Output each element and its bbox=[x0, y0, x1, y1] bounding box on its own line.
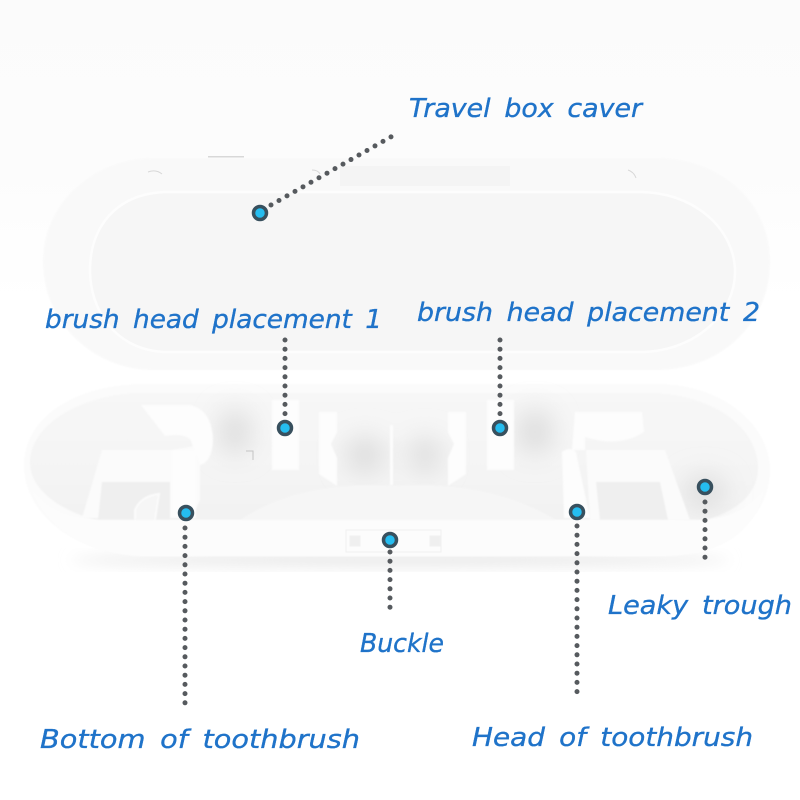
panel: box lid bbox=[43, 156, 770, 370]
annotation: travel box cover: Travel box caver bbox=[409, 94, 644, 124]
buckle bbox=[346, 530, 441, 552]
annotation: brush head placement 1 bbox=[45, 305, 382, 434]
annotation: brush head placement 2 bbox=[417, 298, 760, 434]
annotation: leaky trough: Leaky trough bbox=[608, 591, 792, 621]
annotation: leaky trough bbox=[608, 480, 792, 621]
left bottom tray bbox=[82, 405, 213, 520]
annotation: head of toothbrush: Head of toothbrush bbox=[472, 723, 753, 753]
annotation: bottom of toothbrush bbox=[40, 506, 360, 755]
front rim bbox=[30, 486, 764, 556]
annotation: buckle: Buckle bbox=[360, 629, 444, 659]
brush holders bbox=[272, 400, 514, 486]
annotation: bottom of toothbrush: Bottom of toothbrush bbox=[40, 725, 360, 755]
inner shadows bbox=[219, 410, 725, 508]
trays and holders bbox=[82, 400, 690, 520]
right head tray bbox=[562, 412, 690, 520]
annotation: brush head placement 2: brush head placement 2 bbox=[417, 298, 760, 328]
annotation: travel box cover bbox=[254, 94, 644, 220]
annotation: brush head placement 1: brush head placement 1 bbox=[45, 305, 382, 335]
annotation: buckle bbox=[360, 534, 444, 659]
panel: box base bbox=[24, 384, 770, 566]
annotation: head of toothbrush bbox=[472, 506, 753, 753]
